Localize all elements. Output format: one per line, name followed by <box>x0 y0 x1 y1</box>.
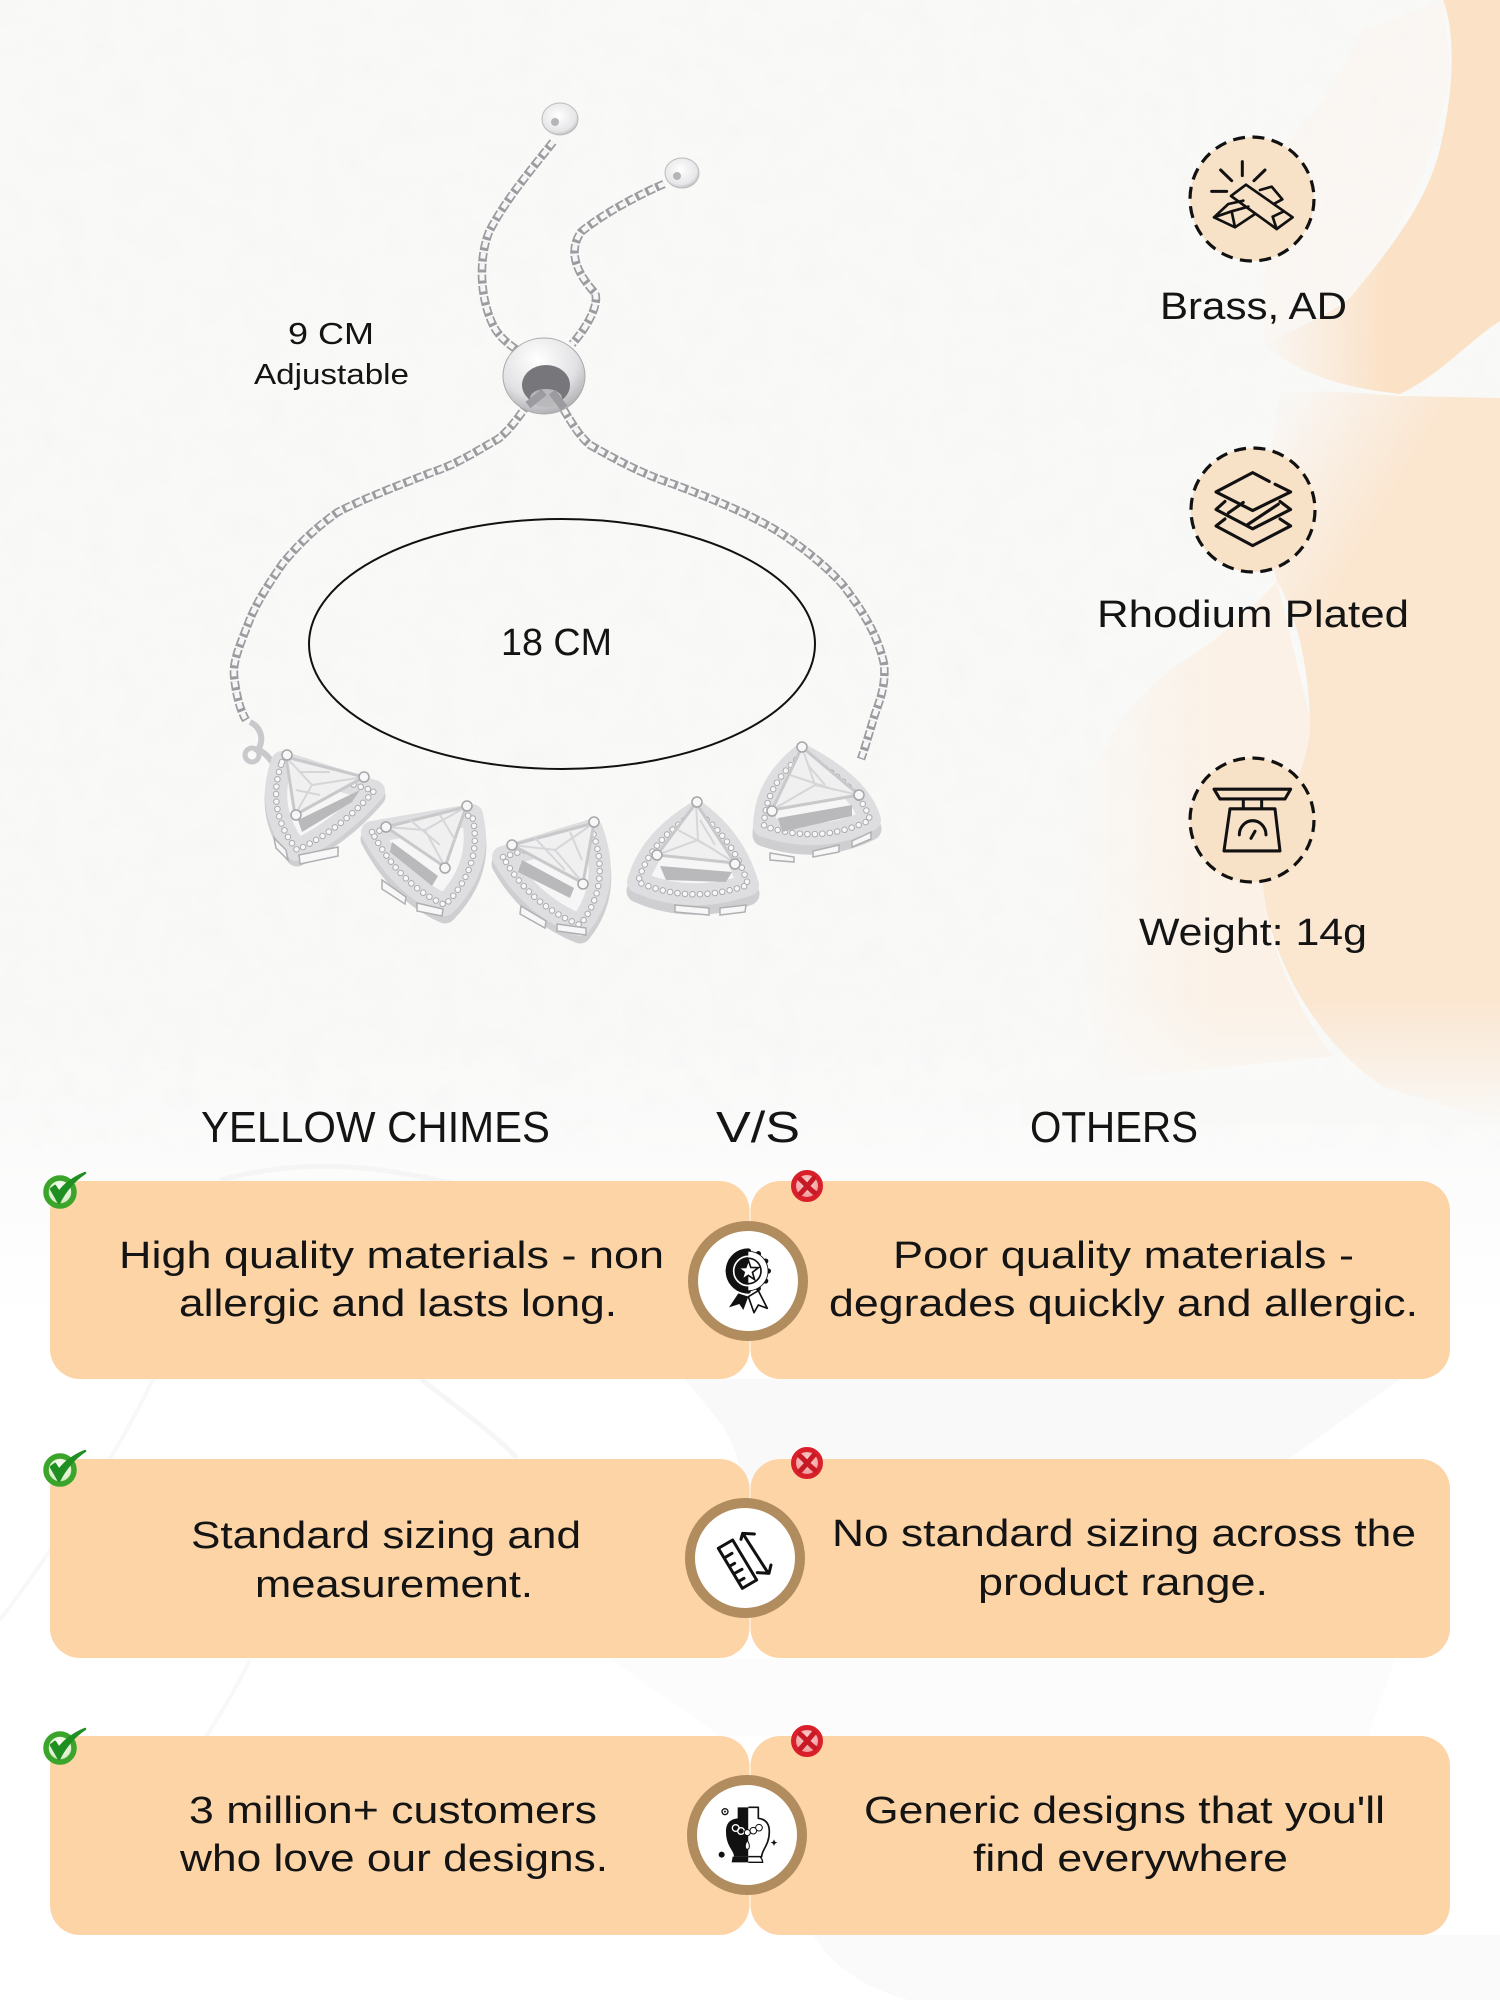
panel: others sizing: No standard sizing across the <box>832 1513 1416 1555</box>
icon: gold bars <box>1190 137 1314 261</box>
gem 3 <box>503 817 600 935</box>
panel: yellow chimes sizing: measurement. <box>255 1564 533 1606</box>
clasp <box>245 722 272 762</box>
chain end bead 2 <box>665 158 699 188</box>
panel: others designs: Generic designs that you'll <box>864 1790 1385 1832</box>
spec: plating <box>1097 448 1409 636</box>
spec: weight <box>1139 758 1367 954</box>
chain: right band <box>558 400 884 759</box>
bracelet photo <box>234 103 884 935</box>
icon: necklace bust medallion <box>692 1780 802 1890</box>
panel: yellow chimes materials: High quality materials - non <box>119 1235 664 1277</box>
gem 2 <box>372 801 475 916</box>
panel: yellow chimes sizing <box>50 1459 750 1658</box>
size ellipse with 18 CM label: 18 CM <box>501 622 612 664</box>
chain: left band <box>234 394 535 720</box>
panel: yellow chimes designs: who love our designs. <box>179 1838 608 1880</box>
icon: ruler medallion <box>690 1503 800 1613</box>
slider bead <box>503 338 585 414</box>
chain end bead 1 <box>542 103 578 135</box>
gem 1 <box>274 750 374 864</box>
icon: green check <box>46 1173 85 1206</box>
panel: yellow chimes materials <box>50 1181 750 1379</box>
icon: green check <box>46 1451 85 1484</box>
label: Brass, AD: Brass, AD <box>1160 286 1347 328</box>
row 1: materials <box>46 1172 1450 1379</box>
gem 5 <box>764 742 871 862</box>
comparison heading: OTHERS <box>1030 1103 1198 1152</box>
panel: others materials: Poor quality materials - <box>893 1235 1354 1277</box>
panel: others designs <box>750 1736 1450 1935</box>
chain: right pull cord <box>572 184 664 344</box>
adjustable length label <box>254 316 409 391</box>
chain: left pull cord <box>482 142 553 350</box>
row 2: sizing <box>46 1450 1450 1658</box>
comparison heading: V/S <box>716 1103 800 1152</box>
size ellipse with 18 CM label <box>309 519 815 769</box>
spec: material <box>1160 137 1347 328</box>
panel: others sizing: product range. <box>978 1562 1268 1604</box>
label: Rhodium Plated: Rhodium Plated <box>1097 594 1409 636</box>
comparison heading <box>201 1103 1198 1152</box>
icon: red cross <box>794 1172 820 1200</box>
label: Weight: 14g: Weight: 14g <box>1139 912 1367 954</box>
panel: yellow chimes sizing: Standard sizing and <box>191 1515 581 1557</box>
icon: kitchen scale <box>1190 758 1314 882</box>
comparison heading: YELLOW CHIMES <box>201 1103 550 1152</box>
icon: red cross <box>794 1728 820 1754</box>
icon: green check <box>46 1729 85 1762</box>
icon: quality rosette medallion <box>693 1226 803 1336</box>
row 3: designs <box>46 1728 1450 1935</box>
icon: layers <box>1191 448 1315 572</box>
adjustable length label: Adjustable <box>254 359 409 391</box>
panel: others sizing <box>750 1459 1450 1658</box>
panel: yellow chimes designs <box>50 1736 750 1935</box>
icon: red cross <box>794 1450 820 1476</box>
panel: yellow chimes designs: 3 million+ customers <box>189 1790 597 1832</box>
adjustable length label: 9 CM <box>288 316 374 351</box>
panel: yellow chimes materials: allergic and lasts long. <box>179 1283 617 1325</box>
panel: others materials: degrades quickly and allergic. <box>829 1283 1418 1325</box>
panel: others designs: find everywhere <box>973 1838 1288 1880</box>
panel: others materials <box>750 1181 1450 1379</box>
gem 4 <box>638 797 748 915</box>
